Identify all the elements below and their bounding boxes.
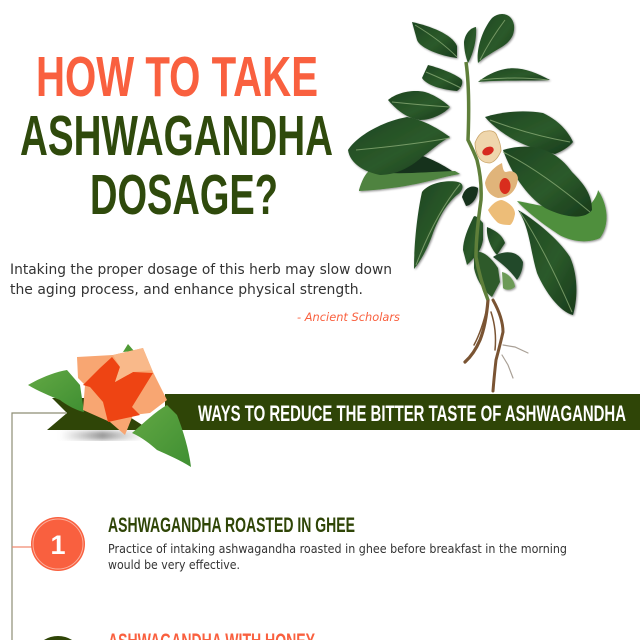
number badge bbox=[31, 517, 85, 571]
seed pods bbox=[475, 131, 518, 225]
horizontal connector from ribbon bbox=[12, 413, 66, 640]
ribbon shadow bbox=[60, 431, 145, 440]
roots bbox=[465, 300, 528, 391]
title bbox=[20, 45, 333, 227]
pod two bbox=[485, 163, 518, 198]
attribution: - Ancient Scholars bbox=[297, 310, 400, 324]
step text: would be very effective. bbox=[108, 558, 240, 572]
pod three bbox=[488, 200, 515, 225]
stem bbox=[466, 62, 488, 300]
connector bbox=[12, 546, 32, 548]
intro text: the aging process, and enhance physical strength. bbox=[10, 282, 363, 298]
number badge bbox=[44, 636, 72, 640]
petal highlight bbox=[113, 348, 152, 382]
title line: dosage: DOSAGE? bbox=[90, 163, 278, 227]
red centre bbox=[83, 357, 153, 422]
step 2 bbox=[44, 630, 315, 640]
ribbon tail bbox=[47, 398, 150, 430]
leaf veins bbox=[356, 20, 590, 312]
ribbon body bbox=[165, 394, 640, 430]
step text bbox=[108, 542, 567, 572]
top leaf bbox=[123, 344, 134, 352]
right leaf bbox=[132, 405, 191, 467]
number badge: 1 bbox=[50, 530, 66, 560]
title line: how to take: HOW TO TAKE bbox=[36, 45, 318, 109]
plant illustration bbox=[348, 14, 607, 391]
flower icon bbox=[28, 344, 191, 467]
step heading: ASHWAGANDHA ROASTED IN GHEE bbox=[108, 514, 355, 537]
intro text: Intaking the proper dosage of this herb may slow down bbox=[10, 262, 392, 278]
petals bbox=[77, 348, 167, 435]
pod one bbox=[475, 131, 501, 163]
step text: Practice of intaking ashwagandha roasted in ghee before breakfast in the morning bbox=[108, 542, 567, 556]
title line: ashwagandha: ASHWAGANDHA bbox=[20, 104, 333, 168]
banner ribbon bbox=[47, 394, 640, 430]
step 1 bbox=[12, 514, 567, 572]
intro text bbox=[10, 262, 392, 298]
left leaf bbox=[28, 370, 84, 412]
leaves bbox=[348, 14, 607, 315]
